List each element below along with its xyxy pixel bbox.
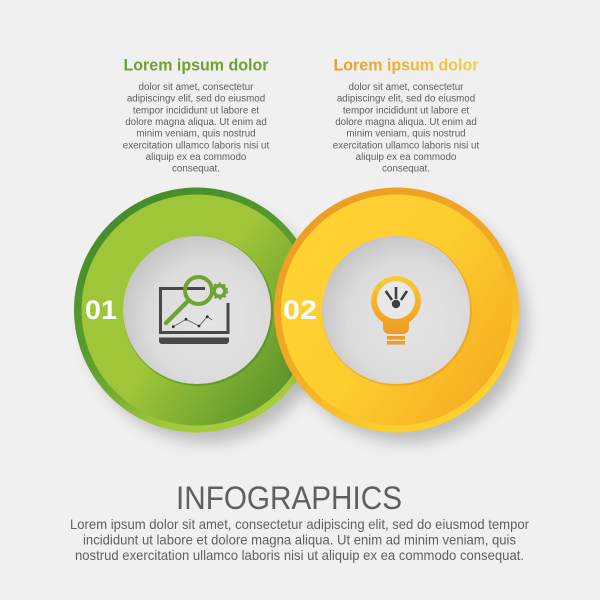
heading: right: Lorem ipsum dolor — [334, 56, 479, 74]
paragraph: right: minim veniam, quis nostrud — [346, 129, 466, 140]
panel: green ring 01 — [74, 188, 326, 442]
number: 01: 01 — [85, 295, 117, 325]
paragraph: right: tempor incididunt ut labore et — [343, 105, 469, 116]
icon: laptop with magnifier and gear — [159, 277, 229, 344]
paragraph: right — [333, 82, 480, 175]
paragraph: right: consequat. — [382, 164, 430, 175]
body text: incididunt ut labore et dolore magna aliqua. Ut enim ad minim veniam, quis — [83, 532, 516, 548]
text block: left column — [123, 56, 270, 175]
paragraph: right: aliquip ex ea commodo — [356, 152, 457, 163]
paragraph: right: exercitation ullamco laboris nisi ut — [333, 140, 480, 151]
paragraph: left: dolore magna aliqua. Ut enim ad — [125, 117, 267, 128]
icon: light bulb — [371, 276, 421, 345]
text block: right column — [333, 56, 480, 175]
paragraph: right: dolore magna aliqua. Ut enim ad — [335, 117, 477, 128]
paragraph: left — [123, 82, 270, 175]
paragraph: left: tempor incididunt ut labore et — [133, 105, 259, 116]
body text: Lorem ipsum dolor sit amet, consectetur adipiscing elit, sed do eiusmod tempor — [70, 516, 529, 532]
paragraph: left: adipiscingv elit, sed do eiusmod — [127, 94, 265, 105]
body text: nostrud exercitation ullamco laboris nisi ut aliquip ex ea commodo consequat. — [75, 547, 524, 563]
panel: orange ring 02 — [274, 188, 526, 442]
paragraph: left: dolor sit amet, consectetur — [139, 82, 254, 93]
paragraph: left: exercitation ullamco laboris nisi ut — [123, 140, 270, 151]
paragraph: right: dolor sit amet, consectetur — [349, 82, 464, 93]
paragraph: right: adipiscingv elit, sed do eiusmod — [337, 94, 475, 105]
paragraph: left: consequat. — [172, 164, 220, 175]
body text — [70, 516, 529, 563]
title: INFOGRAPHICS — [176, 480, 402, 516]
heading: left: Lorem ipsum dolor — [124, 56, 269, 74]
paragraph: left: aliquip ex ea commodo — [146, 152, 247, 163]
paragraph: left: minim veniam, quis nostrud — [136, 129, 256, 140]
number: 02: 02 — [283, 295, 317, 325]
